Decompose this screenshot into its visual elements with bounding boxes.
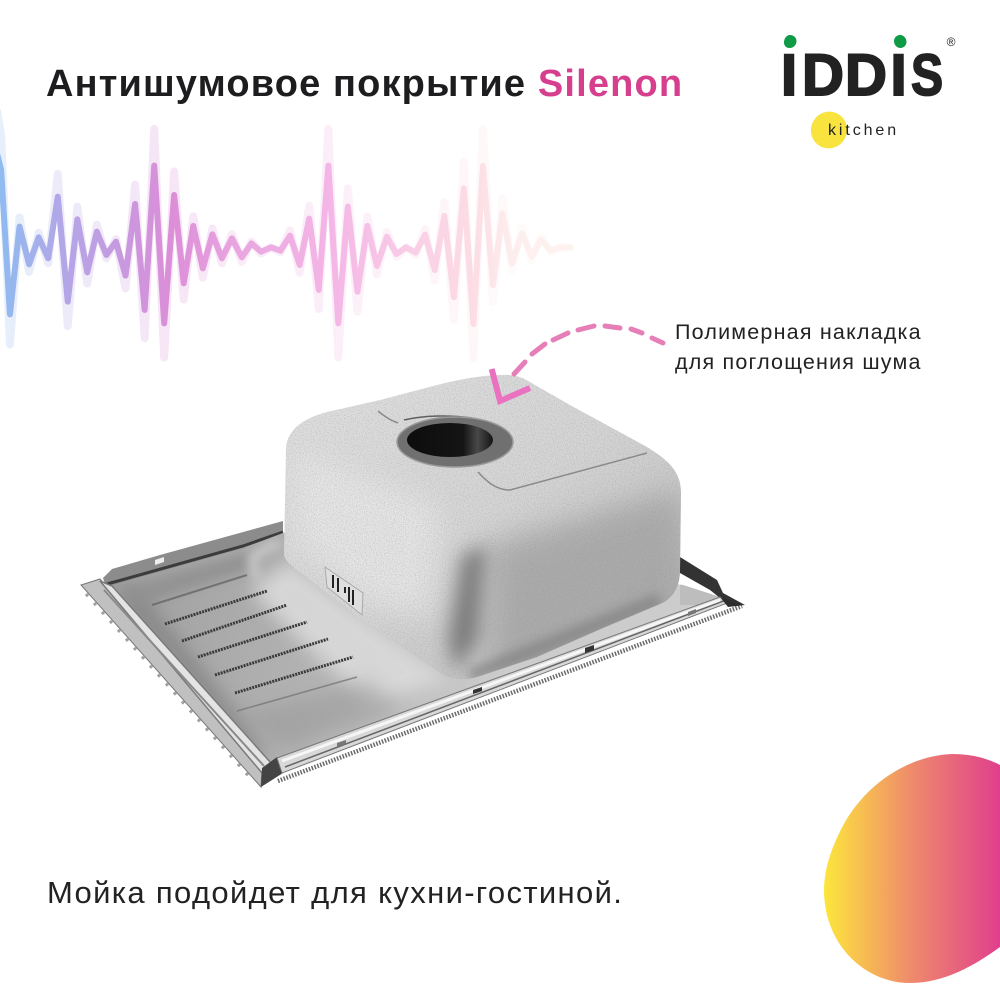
callout text: Полимерная накладка [675, 320, 922, 344]
right rim corner [720, 597, 745, 607]
left rail dark line [104, 590, 264, 766]
deck right [680, 584, 718, 605]
left rim scallops [86, 594, 254, 782]
yellow spot [805, 106, 853, 154]
right flange [680, 557, 745, 605]
deck lower shade [258, 677, 395, 746]
callout arrow [492, 326, 663, 401]
bowl bottom shade [470, 600, 660, 676]
logo dots [784, 35, 906, 48]
silencing pad creases [378, 411, 647, 490]
bowl grain [284, 375, 681, 679]
registered mark: ® [947, 35, 956, 49]
callout text [675, 320, 922, 374]
callout text: для поглощения шума [675, 350, 922, 374]
drain hole [397, 417, 513, 467]
hole opening [407, 423, 493, 457]
bottom text: Мойка подойдет для кухни-гостиной. [47, 875, 623, 910]
bowl [284, 374, 681, 679]
logo wordmark: IDDI [781, 43, 907, 108]
deck light zone [250, 560, 450, 705]
rim corner [261, 757, 283, 787]
left rail [100, 581, 271, 773]
overflow label [325, 567, 363, 615]
deck [112, 533, 718, 762]
front rim dark line [285, 600, 726, 767]
deck top shade [137, 552, 248, 599]
dashed curve [514, 326, 663, 374]
pale wave halo [0, 111, 570, 358]
logo [781, 35, 956, 154]
title: Антишумовое покрытие Silenon [46, 63, 683, 105]
deck dark zone [122, 595, 267, 755]
sound wave [0, 111, 570, 358]
flange clip [155, 557, 164, 565]
front rim highlight [282, 600, 720, 761]
front rim teeth [278, 606, 742, 781]
logo kitchen: kitchen [828, 122, 899, 139]
bowl base [284, 374, 681, 656]
deck base [112, 533, 716, 762]
deck bend highlight [252, 543, 280, 578]
label plate [325, 567, 363, 615]
sink illustration [81, 365, 745, 787]
back flange [103, 521, 283, 590]
back flange dark edge [107, 532, 283, 584]
bowl left face light [303, 472, 436, 616]
front rim band [277, 597, 730, 773]
bowl dark corner [448, 545, 486, 672]
bowl right face [481, 486, 681, 672]
hole rim [397, 417, 513, 467]
drainboard ribs [152, 575, 357, 711]
label marks [333, 575, 353, 605]
left rim outer [81, 579, 262, 787]
rim clips [473, 645, 594, 694]
logo letter S: S [911, 44, 943, 108]
main wave line [0, 153, 570, 324]
decorative blob [824, 754, 1000, 983]
arrow head [492, 369, 530, 401]
